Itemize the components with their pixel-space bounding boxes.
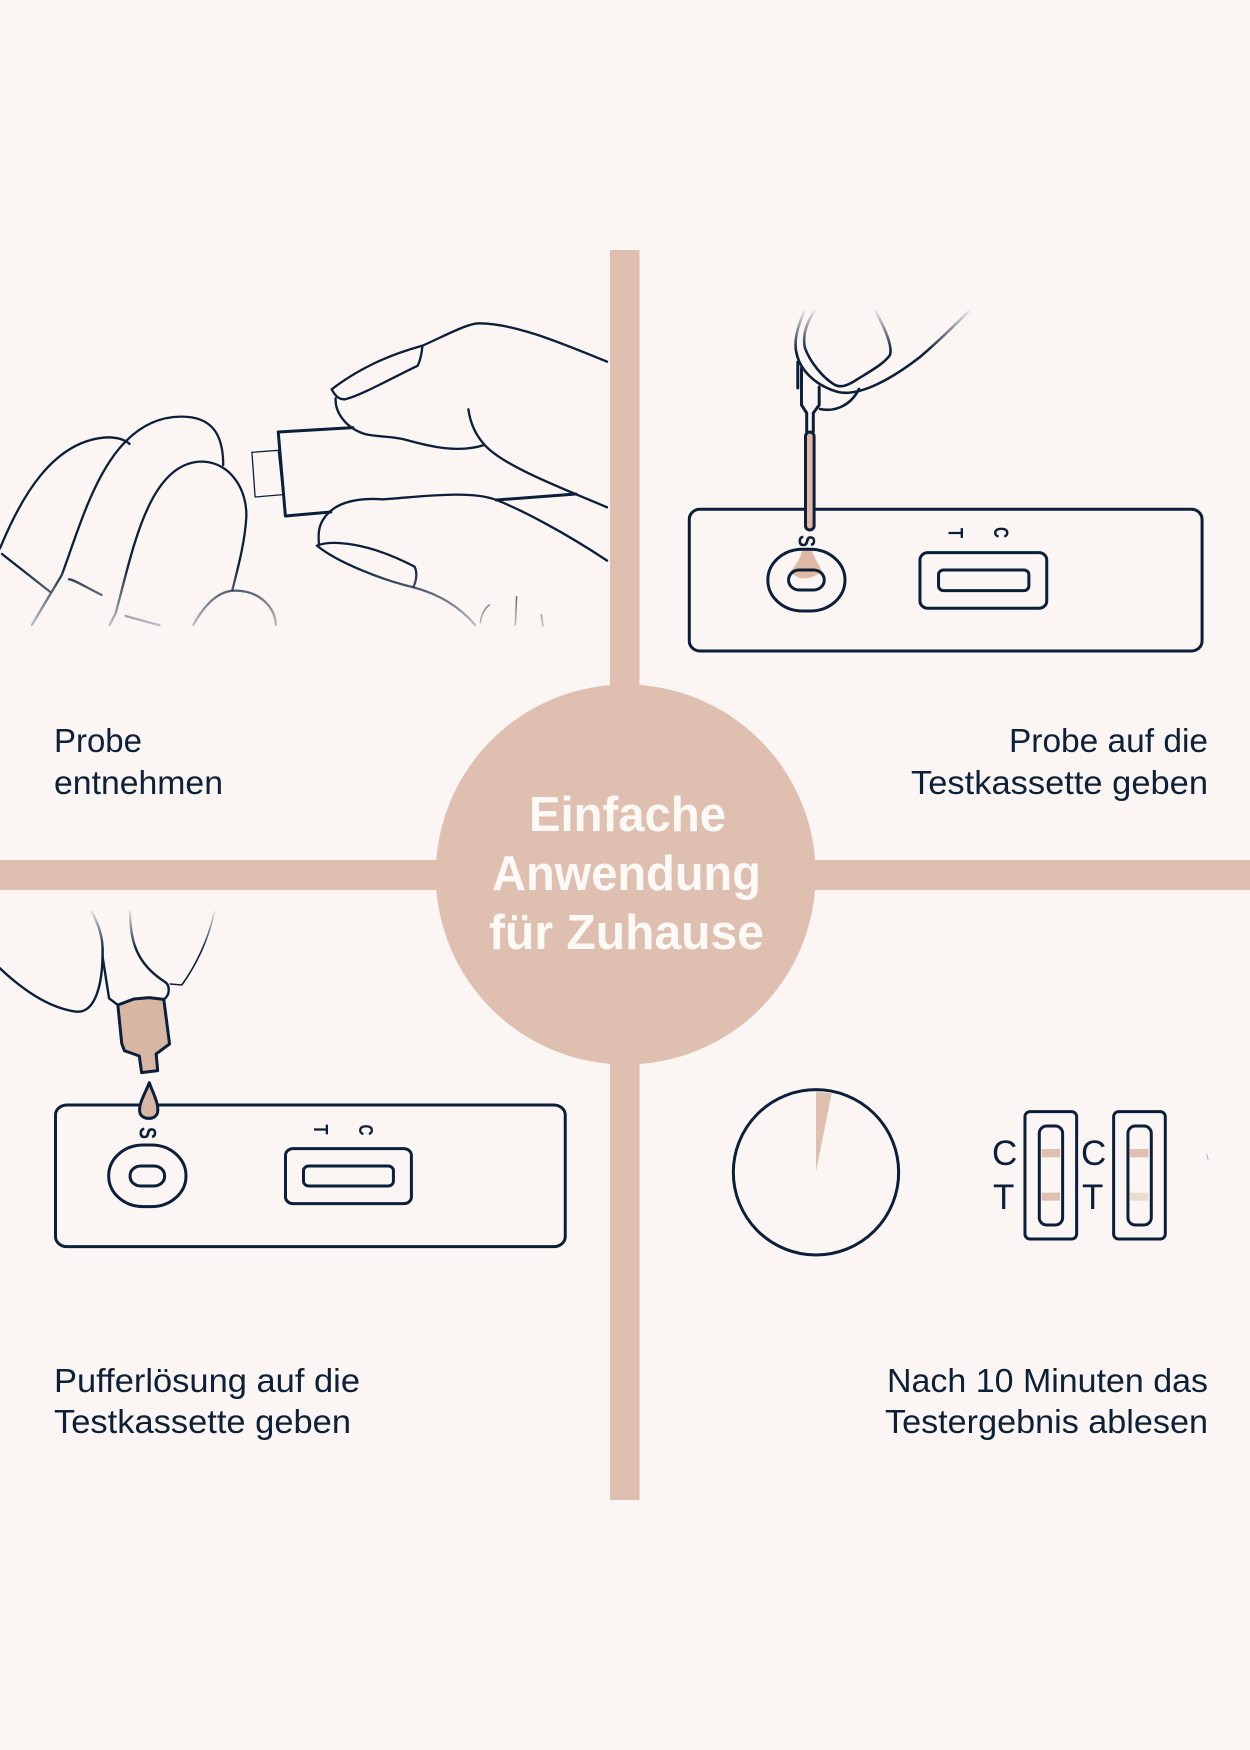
result cassette positive: [1025, 1112, 1077, 1239]
caption: [54, 723, 223, 802]
cassette labels: C: [989, 527, 1012, 538]
cassette labels C T: T: [1082, 1178, 1103, 1217]
cassette body: [55, 1105, 565, 1247]
title: für Zuhause: [489, 906, 764, 960]
cassette labels: [792, 527, 1012, 547]
caption: Testkassette geben: [54, 1404, 351, 1441]
caption: Pufferlösung auf die: [54, 1363, 360, 1400]
dropper bottle: [118, 998, 170, 1073]
drop: [140, 1083, 158, 1118]
fingers: [0, 912, 214, 1012]
panel: step 3 add buffer solution: [0, 912, 565, 1441]
swab stick: [806, 432, 814, 530]
cassette labels C T: [992, 1134, 1106, 1217]
vertical divider bar: [610, 250, 640, 1500]
caption: [911, 723, 1208, 802]
panel: step 1 sample collection: [0, 323, 607, 802]
panel: step 4 read result: [733, 1090, 1208, 1441]
caption: Testkassette geben: [911, 765, 1208, 802]
swab neck and fingers: [796, 310, 970, 432]
cassette labels C T: C: [1081, 1134, 1106, 1173]
icon: clock wedge: [816, 1092, 832, 1172]
result window: [285, 1149, 411, 1204]
horizontal divider bar: [0, 860, 1250, 890]
cassette labels: S: [134, 1127, 160, 1139]
cassette labels: [134, 1124, 376, 1139]
cassette labels: T: [309, 1124, 331, 1134]
result cassette faint line: [1114, 1112, 1165, 1239]
caption: Nach 10 Minuten das: [887, 1363, 1208, 1400]
title: Einfache: [529, 788, 726, 842]
sample spread: [790, 548, 821, 578]
panel: step 2 apply sample to cassette: [689, 310, 1208, 802]
caption: Probe: [54, 723, 142, 760]
cassette labels: T: [944, 528, 967, 538]
caption: Probe auf die: [1009, 723, 1208, 760]
sample well: [109, 1145, 186, 1207]
center circle with title: [436, 684, 816, 1064]
caption: [885, 1363, 1208, 1441]
cassette body: [689, 509, 1202, 651]
title: [489, 788, 764, 960]
illustration: dropper and cassette: [0, 912, 565, 1247]
sample well: [768, 549, 845, 611]
caption: [54, 1363, 360, 1441]
caption: Testergebnis ablesen: [885, 1404, 1208, 1441]
title: Anwendung: [492, 847, 761, 901]
cassette labels C T: T: [993, 1178, 1014, 1217]
cassette labels: S: [792, 535, 820, 547]
illustration: hands holding swab tube: [0, 323, 607, 626]
result window: [920, 553, 1047, 608]
illustration: cassette: [689, 509, 1202, 651]
illustration: timer and result cassettes: [733, 1090, 1208, 1255]
caption: entnehmen: [54, 765, 223, 802]
cassette labels: C: [354, 1124, 376, 1136]
icon: clock: [733, 1090, 899, 1255]
cassette labels C T: C: [992, 1134, 1017, 1173]
